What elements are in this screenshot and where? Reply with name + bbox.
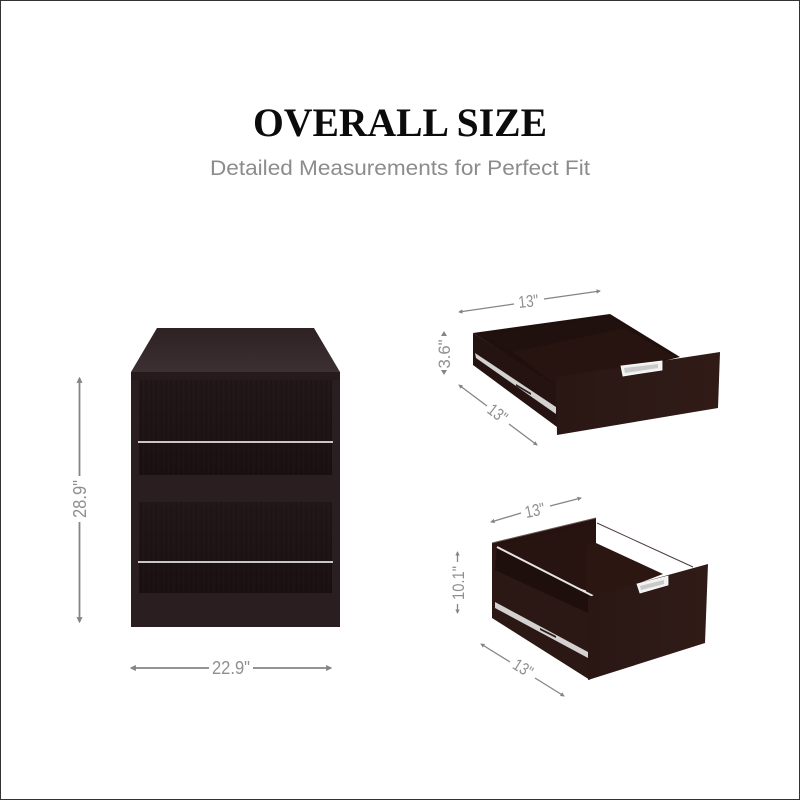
left outer side (492, 543, 590, 680)
lower open compartment (139, 502, 332, 593)
drawer floor (513, 328, 675, 386)
top edge highlight (492, 518, 596, 543)
dimension: tall drawer depth 13: 13" (509, 655, 536, 682)
dimension: small drawer height 3.6: 3.6" (435, 340, 454, 368)
dimension: small drawer depth 13: 13" (484, 400, 511, 427)
upper open compartment (139, 380, 332, 475)
cabinet illustration (131, 328, 340, 627)
cabinet top surface (131, 328, 340, 372)
slide slot (540, 628, 556, 638)
front panel (588, 564, 708, 680)
drawer rim and interior (473, 314, 680, 387)
dimension: small drawer width 13 (459, 291, 600, 312)
upper metal rail (138, 441, 333, 443)
back wall inside (483, 317, 625, 352)
side slide rail (495, 602, 588, 658)
dimension: small drawer height 3.6 (435, 331, 454, 375)
tall drawer illustration (492, 518, 708, 680)
top front edge (131, 372, 340, 380)
side slide rail (475, 353, 556, 414)
left outer side (473, 333, 557, 427)
handle (637, 576, 668, 593)
small drawer illustration (473, 314, 720, 435)
dimension: tall drawer width 13 (491, 498, 581, 522)
slide slot (516, 384, 531, 395)
divider top rail (497, 547, 593, 596)
inner right wall (586, 543, 663, 598)
dimension: cabinet width 22.9: 22.9" (212, 658, 250, 678)
wire rod (597, 523, 693, 567)
dimension: tall drawer width 13: 13" (523, 499, 547, 522)
dimension: cabinet height 28.9: 28.9" (70, 480, 90, 518)
dimension: tall drawer depth 13 (481, 644, 564, 696)
dimension: small drawer width 13: 13" (517, 291, 539, 312)
front panel (556, 352, 720, 435)
handle (621, 361, 662, 376)
title: OVERALL SIZE (253, 100, 547, 145)
dimension: small drawer depth 13 (459, 385, 537, 445)
subtitle: Detailed Measurements for Perfect Fit (210, 157, 590, 180)
dimension: tall drawer height 10.1: 10.1" (449, 566, 468, 600)
cabinet body (131, 372, 340, 627)
dimension: tall drawer height 10.1 (449, 552, 468, 613)
inner divider (495, 547, 593, 613)
rear panel (492, 518, 596, 592)
back wall (498, 523, 596, 592)
lower metal rail (138, 561, 333, 563)
